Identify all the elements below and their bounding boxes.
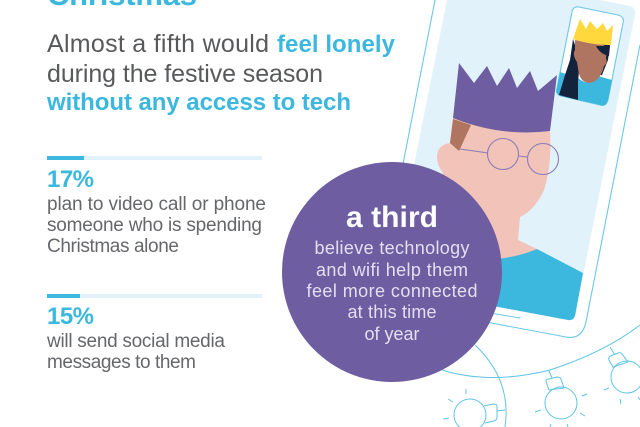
callout: a third: at this time: [348, 302, 436, 322]
stat: 15%: will send social media: [46, 331, 225, 352]
bulb 3: [604, 347, 640, 404]
inset video call: [556, 7, 623, 105]
bulb 1: [443, 389, 505, 427]
callout: a third: [282, 162, 502, 382]
callout: a third: feel more connected: [306, 281, 478, 301]
paper crown: [453, 63, 557, 132]
stat: 17%: [47, 156, 266, 257]
woman's crown: [573, 19, 613, 45]
stat: 17%: 17%: [47, 166, 94, 193]
face and neck: [420, 118, 550, 260]
string of lights: [442, 325, 640, 427]
woman's top: [556, 72, 612, 105]
callout: a third: and wifi help them: [316, 260, 468, 280]
stat: 17%: someone who is spending: [47, 215, 262, 236]
stat: 15%: [46, 294, 262, 373]
callout: a third: believe technology: [314, 238, 470, 258]
hair: [450, 119, 471, 151]
phone illustration: [380, 0, 640, 337]
phone screen: [380, 0, 635, 320]
phone outline: [395, 0, 640, 337]
callout: a third: of year: [364, 324, 420, 344]
woman's face: [574, 40, 607, 83]
intro text: Almost a fifth would: [47, 30, 269, 58]
shirt: [440, 249, 583, 320]
stat: 15%: messages to them: [47, 352, 196, 373]
woman's hair: [559, 39, 580, 100]
stat: 17%: Christmas alone: [47, 236, 179, 257]
bulb 2: [535, 371, 587, 427]
callout: a third: a third: [346, 201, 438, 234]
intro text: feel lonely: [277, 31, 396, 58]
glasses: [460, 138, 558, 174]
intro text: during the festive season: [47, 60, 323, 88]
stat: 15%: 15%: [47, 303, 94, 330]
intro text: without any access to tech: [46, 89, 351, 116]
stat: 17%: plan to video call or phone: [47, 194, 266, 215]
man with paper crown: [420, 63, 583, 320]
intro text: [46, 30, 396, 116]
